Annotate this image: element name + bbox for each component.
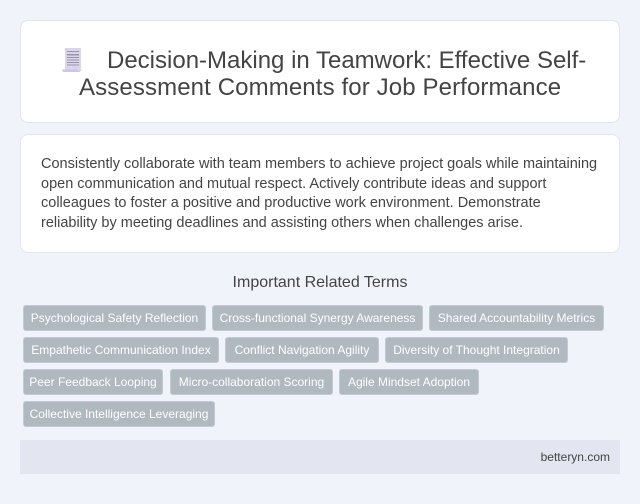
- heading: related terms: Important Related Terms: [233, 274, 407, 291]
- icon: scroll document: [62, 48, 82, 72]
- tag: Collective Intelligence Leveraging: [30, 407, 208, 421]
- description text: [41, 156, 597, 230]
- tag: [23, 401, 215, 427]
- description text: colleagues to foster a positive and productive work environment. Demonstrate: [41, 195, 541, 211]
- tag: Agile Mindset Adoption: [348, 375, 470, 389]
- tag: Cross-functional Synergy Awareness: [220, 311, 415, 325]
- title line 1: Decision-Making in Teamwork: Effective Self-: [107, 47, 586, 74]
- tag: Empathetic Communication Index: [31, 343, 211, 357]
- tag: [385, 337, 568, 363]
- footer text: site name: betteryn.com: [541, 450, 610, 464]
- tag: Conflict Navigation Agility: [235, 343, 369, 357]
- tag: [23, 369, 163, 395]
- tag: [212, 305, 423, 331]
- tag: [23, 305, 206, 331]
- tag: Psychological Safety Reflection: [31, 311, 198, 325]
- tag: [429, 305, 604, 331]
- panel: description: [20, 134, 620, 253]
- tag: Micro-collaboration Scoring: [179, 375, 324, 389]
- description text: open communication and mutual respect. Actively contribute ideas and support: [41, 176, 546, 192]
- tag: [225, 337, 379, 363]
- description text: Consistently collaborate with team members to achieve project goals while maintaining: [41, 156, 597, 172]
- tag: [339, 369, 479, 395]
- tag: [23, 337, 219, 363]
- tag: Shared Accountability Metrics: [438, 311, 595, 325]
- tag: Diversity of Thought Integration: [393, 343, 560, 357]
- tag: [170, 369, 333, 395]
- tag: Peer Feedback Looping: [29, 375, 157, 389]
- description text: reliability by meeting deadlines and assisting others when challenges arise.: [41, 214, 523, 230]
- title line 2: Assessment Comments for Job Performance: [79, 74, 561, 101]
- panel: title card: [20, 20, 620, 123]
- footer bar: [20, 440, 620, 474]
